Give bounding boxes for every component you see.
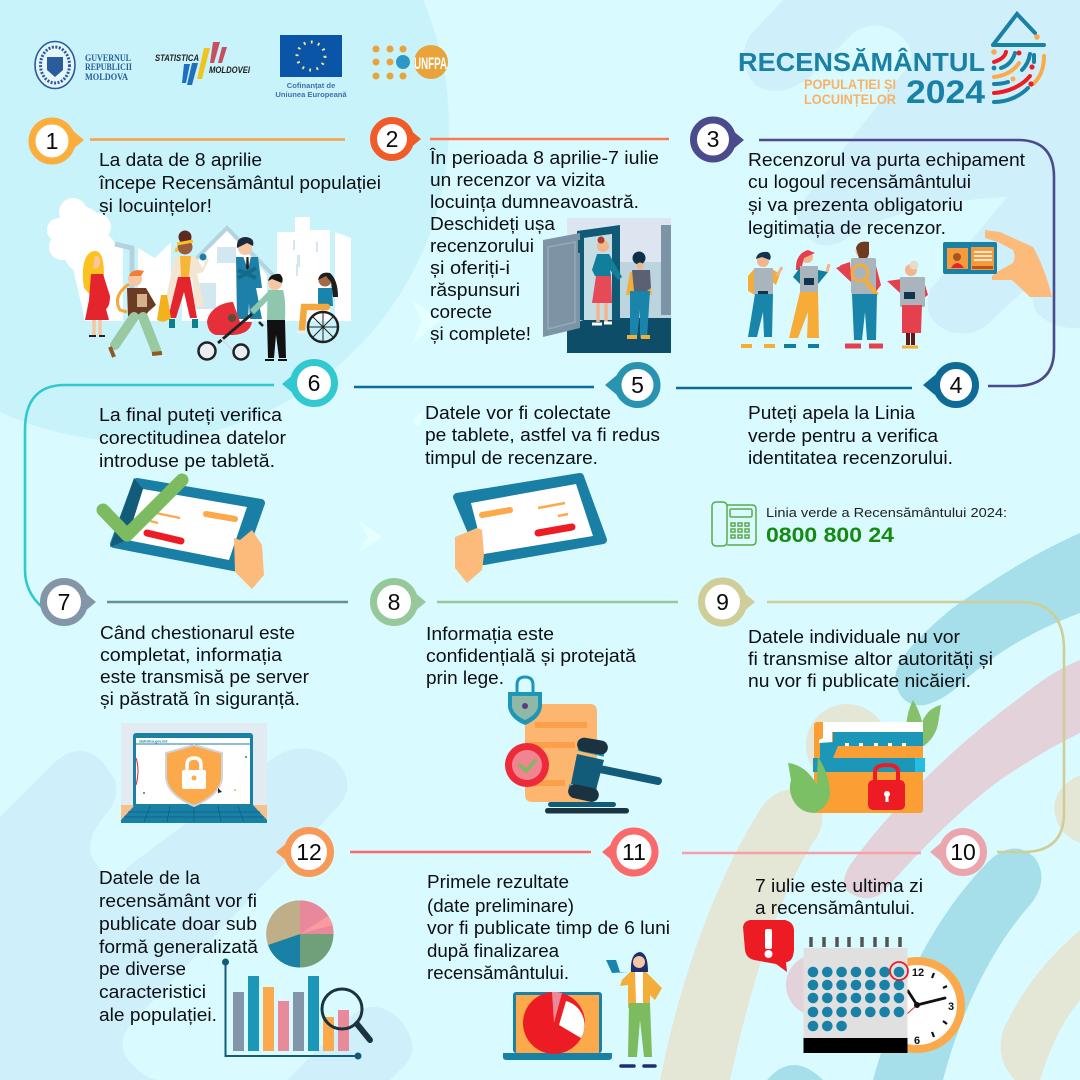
logo: Guvernul Republicii Moldova: GUVERNUL <box>85 54 131 64</box>
person: woman with laptop <box>606 952 662 1066</box>
text 12: publicate doar sub <box>99 914 257 934</box>
icon: alert bubble <box>743 920 794 972</box>
badge 2 <box>374 120 421 158</box>
text 9: fi transmise altor autorități și <box>748 649 993 669</box>
badge 5: 5 <box>631 372 644 398</box>
connector line 6 to 7 <box>25 385 274 607</box>
text 3: legitimația de recenzor. <box>748 218 946 238</box>
text 4: identitatea recenzorului. <box>748 448 953 468</box>
icon: gavel <box>545 737 658 814</box>
logo: UNFPA <box>372 45 448 80</box>
panel 1: start of the census <box>32 121 381 360</box>
text 6: introduse pe tabletă. <box>99 451 275 471</box>
text 12: Datele de la <box>99 868 201 888</box>
text 7: este transmisă pe server <box>100 667 309 687</box>
text 6: corectitudinea datelor <box>99 428 286 448</box>
text 11 <box>427 872 670 983</box>
text 2: În perioada 8 aprilie-7 iulie <box>429 148 659 168</box>
badge 4 <box>923 366 976 404</box>
text 12: recensământ vor fi <box>99 891 257 911</box>
text 6 <box>99 405 286 471</box>
panel 3: enumerator equipment <box>694 120 1054 386</box>
logo: UNFPA: UNFPA <box>414 54 447 73</box>
panel 10: last day <box>682 832 984 1053</box>
person: enumerator three <box>836 242 883 346</box>
green line number: Linia verde a Recensământului 2024: <box>766 505 1007 520</box>
connector line 2 <box>430 138 669 140</box>
text 2: Deschideți ușa <box>430 214 556 234</box>
illustration: four enumerators <box>741 242 928 347</box>
text 7: Când chestionarul este <box>100 623 295 643</box>
panel 11: preliminary results <box>350 831 670 1066</box>
text 5: Datele vor fi colectate <box>425 403 611 423</box>
text 1 <box>98 150 381 216</box>
icon: padlock shield <box>508 677 542 725</box>
icon: clock <box>873 961 961 1049</box>
text 11: (date preliminare) <box>427 896 574 916</box>
connector line 5 to 6 <box>354 386 594 388</box>
badge 12 <box>276 830 330 874</box>
connector line 1 <box>90 138 345 141</box>
panel 5: tablets <box>354 366 660 583</box>
text 8: prin lege. <box>426 668 504 688</box>
connector line 3 to 4 <box>759 140 1054 386</box>
text 2 <box>429 148 659 344</box>
text 11: vor fi publicate timp de 6 luni <box>427 918 670 938</box>
header logos <box>35 35 448 99</box>
person: stroller <box>198 302 252 360</box>
text 6: La final puteți verifica <box>99 405 283 425</box>
badge 3 <box>694 120 744 159</box>
connector line 11 to 12 <box>350 851 591 853</box>
text 5: pe tablete, astfel va fi redus <box>425 425 660 445</box>
illustration: locked folder with leaves <box>788 700 941 813</box>
text 2: și complete! <box>430 324 531 344</box>
text 9: Datele individuale nu vor <box>748 627 960 647</box>
badge 1 <box>32 121 84 161</box>
illustration: document, seal and gavel <box>505 677 658 814</box>
logo: Recensământul 2024: POPULAȚIEI ȘI <box>804 76 896 92</box>
text 10: 7 iulie este ultima zi <box>755 876 923 896</box>
badge 3: 3 <box>707 126 719 152</box>
person: boy with sweater <box>252 274 287 360</box>
panel 9: no transmission of data <box>702 581 1064 852</box>
text 4 <box>748 403 953 468</box>
panel 2: visit of the enumerator <box>374 120 671 353</box>
icon: clock: 6 <box>914 1035 920 1047</box>
person: enumerator two <box>784 250 829 346</box>
icon: clock: 12 <box>912 967 924 979</box>
text 11: Primele rezultate <box>427 872 569 892</box>
logo: Statistica Moldovei: MOLDOVEI <box>209 65 250 75</box>
text 2: răspunsuri <box>430 280 520 300</box>
badge 4: 4 <box>950 372 963 398</box>
logo: Recensământul 2024 <box>738 14 1044 110</box>
bar chart <box>222 958 370 1060</box>
text 7: completat, informația <box>100 645 283 665</box>
logo: Recensământul 2024: 2024 <box>906 74 985 110</box>
logo: Guvernul Republicii Moldova <box>35 42 132 88</box>
illustration: laptop with shield: statistica.gov.md <box>139 740 167 744</box>
badge 1: 1 <box>46 128 58 154</box>
logo: European Union <box>275 35 347 99</box>
pie chart <box>266 900 334 968</box>
text 12: caracteristici <box>99 982 206 1002</box>
badge 12: 12 <box>296 839 322 865</box>
text 12: ale populației. <box>99 1005 217 1025</box>
text 3: și va prezenta obligatoriu <box>748 195 963 215</box>
logo: Statistica Moldovei: STATISTICA <box>155 53 199 63</box>
person: enumerator four <box>887 260 928 347</box>
illustration: hand holding ID card <box>943 230 1052 297</box>
text 8: Informația este <box>426 624 554 644</box>
text 9: nu vor fi publicate nicăieri. <box>748 671 971 691</box>
text 5: timpul de recenzare. <box>425 448 598 468</box>
text 2: și oferiți-i <box>430 258 510 278</box>
text 2: locuința dumneavoastră. <box>430 192 639 212</box>
connector line 8 to 9 <box>437 601 678 603</box>
panel 6: verifying data <box>25 362 334 607</box>
text 9 <box>748 627 993 691</box>
illustration: laptop with pie chart <box>503 992 612 1060</box>
text 1: și locuințelor! <box>99 196 212 216</box>
logo: Guvernul Republicii Moldova: MOLDOVA <box>85 73 128 83</box>
badge 11: 11 <box>622 839 646 865</box>
badge 10 <box>930 832 984 872</box>
text 2: corecte <box>430 302 492 322</box>
text 11: după finalizarea <box>427 941 560 961</box>
connector line 7 to 8 <box>107 601 348 603</box>
badge 8 <box>374 582 426 622</box>
panel 12: generalised data <box>99 830 370 1060</box>
person: woman in wheelchair <box>297 273 338 342</box>
illustration: laptop with shield <box>121 723 267 823</box>
logo: Guvernul Republicii Moldova: REPUBLICII <box>85 63 132 73</box>
text 2: un recenzor va vizita <box>430 170 606 190</box>
person: woman with coat <box>157 230 209 328</box>
badge 2: 2 <box>386 126 398 152</box>
person: man in suit <box>236 237 263 326</box>
text 2: recenzorului <box>430 236 534 256</box>
connector line 10 to 11 <box>682 852 921 854</box>
text 3: Recenzorul va purta echipament <box>748 150 1025 170</box>
text 12: pe diverse <box>99 959 186 979</box>
icon: telephone <box>712 502 756 546</box>
badge 9: 9 <box>716 589 729 615</box>
text 3 <box>748 150 1025 238</box>
logo: European Union: Uniunea Europeană <box>275 90 347 99</box>
text 10: a recensământului. <box>755 898 915 918</box>
illustration: enumerator at the door <box>543 218 671 353</box>
text 12: formă generalizată <box>99 937 259 957</box>
text 1: începe Recensământul populației <box>98 173 381 193</box>
connector line 9 to 10 <box>767 602 1064 852</box>
text 7 <box>100 623 309 709</box>
badge 7: 7 <box>58 589 70 615</box>
text 5 <box>425 403 660 468</box>
text 4: verde pentru a verifica <box>748 426 939 446</box>
text 3: cu logoul recensământului <box>748 172 971 192</box>
icon: clock: 3 <box>948 1001 954 1013</box>
panel 4: green line <box>676 366 1007 547</box>
person: enumerator one <box>741 252 782 346</box>
logo: Recensământul 2024: LOCUINȚELOR <box>804 91 896 107</box>
badge 7 <box>44 582 96 622</box>
text 8: confidențială și protejată <box>426 646 637 666</box>
badge 11 <box>602 831 655 873</box>
badge 9 <box>702 581 755 623</box>
illustration: calendar, clock and alert <box>743 920 961 1053</box>
panel 8: confidentiality <box>374 582 678 814</box>
icon: red seal <box>505 743 549 787</box>
green line number <box>766 505 1007 547</box>
badge 8: 8 <box>388 589 400 615</box>
person: resident <box>592 236 622 324</box>
person: enumerator with backpack <box>626 252 652 338</box>
illustration: tablet with check mark <box>103 478 264 589</box>
text 10 <box>755 876 923 918</box>
text 8 <box>426 624 637 688</box>
icon: magnifier <box>322 989 370 1040</box>
text 12 <box>99 868 259 1025</box>
logo: European Union: Cofinanțat de <box>287 81 335 90</box>
logo: Statistica Moldovei <box>155 42 250 85</box>
person: pregnant woman <box>83 251 110 336</box>
badge 5 <box>605 366 657 404</box>
green line number: 0800 800 24 <box>766 524 894 547</box>
badge 10: 10 <box>950 839 976 865</box>
icon: calendar <box>804 937 908 1053</box>
panel 7: data sent to server <box>44 582 348 823</box>
badge 6: 6 <box>308 370 320 396</box>
illustration: people in front of city <box>47 198 351 360</box>
illustration: tablet held in hand <box>455 477 603 583</box>
text 11: recensământului. <box>427 963 569 983</box>
badge 6 <box>282 362 334 404</box>
text 1: La data de 8 aprilie <box>99 150 262 170</box>
connector line 4 to 5 <box>676 387 912 389</box>
person: boy walking <box>110 270 162 357</box>
logo: Recensământul 2024: RECENSĂMÂNTUL <box>738 47 985 77</box>
text 4: Puteți apela la Linia <box>748 403 916 423</box>
text 7: și păstrată în siguranță. <box>100 689 300 709</box>
